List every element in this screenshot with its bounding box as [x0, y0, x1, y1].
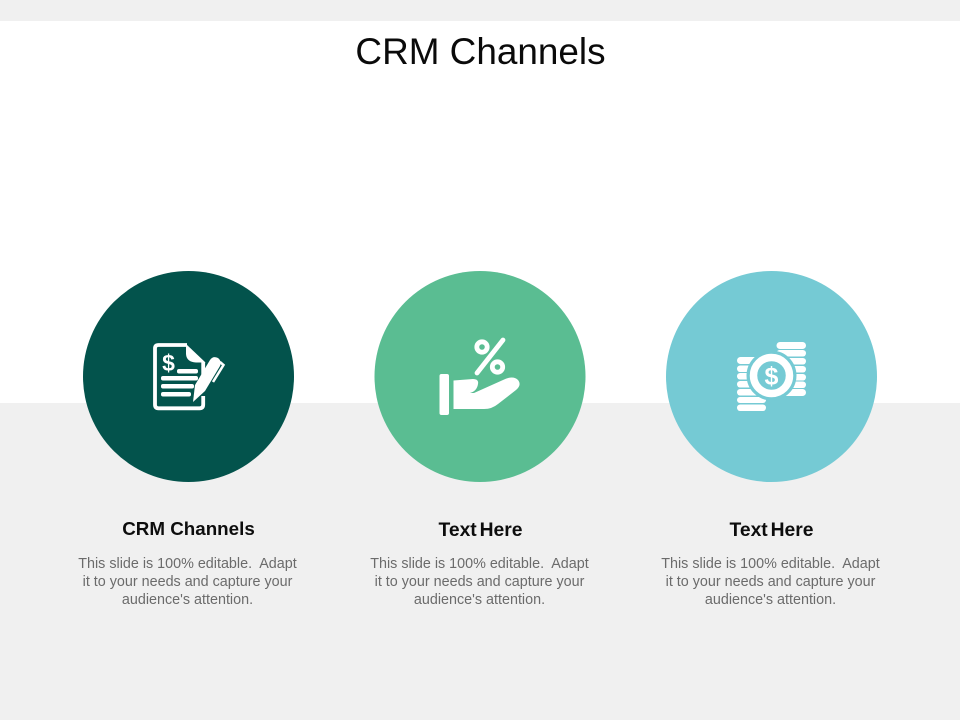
text block: column 1: This slide is 100% editable. Adapt it to your needs and capture your audience's attention.: [78, 556, 297, 608]
icon: hand holding percent: [440, 340, 520, 415]
panel: blue circle with coins icon: [666, 271, 877, 482]
icon: coin stacks: [737, 342, 806, 411]
icon: document with pen: [155, 344, 224, 408]
text block: column 2: This slide is 100% editable. Adapt it to your needs and capture your audience's attention.: [370, 556, 589, 608]
heading: column 2: Text Here: [439, 520, 522, 541]
panel: dark green circle with document icon: [83, 271, 294, 482]
text block: column 3: This slide is 100% editable. Adapt it to your needs and capture your audience's attention.: [661, 556, 880, 608]
heading: column 3: Text Here: [730, 520, 813, 541]
icon: coin stacks: $: [765, 362, 779, 390]
title: CRM Channels: [355, 31, 606, 72]
icon: document with pen: $: [162, 350, 175, 376]
panel: green circle with percent hand icon: [374, 271, 586, 482]
heading: column 1: CRM Channels: [122, 518, 255, 539]
